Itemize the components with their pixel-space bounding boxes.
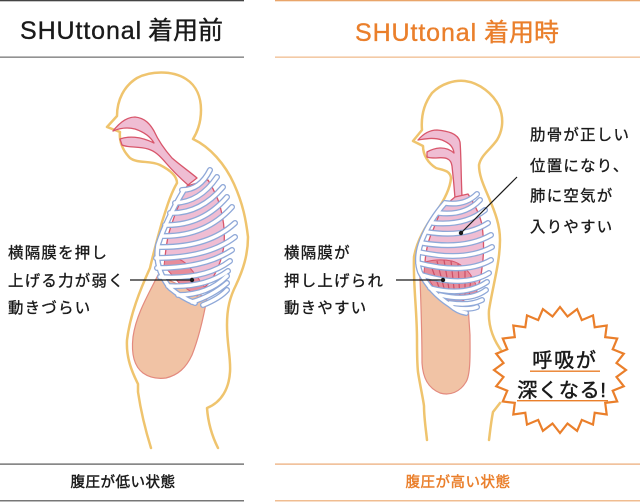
panel: before wearing	[0, 0, 248, 502]
callout text	[517, 349, 607, 402]
heading: before: 着用前	[148, 17, 223, 45]
label: diaphragm before: 動きづらい	[8, 299, 91, 317]
ribs: while wearing	[418, 194, 492, 313]
label: diaphragm while wearing: 横隔膜が	[284, 244, 351, 262]
lungs: while wearing	[425, 194, 484, 303]
callout underlines	[517, 370, 608, 401]
leader line: ribs	[459, 177, 517, 235]
belly: before	[132, 275, 207, 378]
label: diaphragm while wearing: 動きやすい	[284, 299, 367, 317]
heading: while wearing: 着用時	[484, 19, 559, 47]
burst shape	[494, 307, 626, 433]
header rule right	[275, 56, 640, 58]
footer rules right	[275, 464, 640, 502]
label: ribs: 入りやすい	[530, 218, 613, 236]
caption: before: 腹圧が低い状態	[70, 474, 176, 491]
airway: while wearing	[418, 130, 462, 198]
label: ribs: 位置になり、	[530, 157, 630, 175]
leader line: diaphragm before	[130, 278, 194, 282]
ribs: before	[156, 170, 235, 305]
label: ribs	[530, 126, 630, 236]
belly: while wearing	[420, 278, 470, 394]
label: ribs: 肺に空気が	[530, 187, 613, 205]
callout: breathing becomes deeper	[494, 307, 626, 433]
heading: before: SHUttonal	[20, 17, 142, 45]
body outline: while wearing	[413, 81, 503, 440]
label: diaphragm before: 横隔膜を押し	[8, 244, 108, 262]
lungs: before	[165, 180, 224, 289]
top rule right	[275, 0, 640, 1]
panel: while wearing	[275, 0, 640, 502]
label: diaphragm while wearing: 押し上げられ	[284, 272, 384, 290]
label: ribs: 肋骨が正しい	[530, 126, 630, 144]
caption: while wearing: 腹圧が高い状態	[406, 474, 510, 491]
top rule left	[0, 0, 244, 1]
label: diaphragm before: 上げる力が弱く	[8, 272, 125, 290]
label: diaphragm before	[8, 244, 125, 317]
leader line: diaphragm while wearing	[396, 278, 445, 282]
label: diaphragm while wearing	[284, 244, 384, 317]
callout text: 深くなる!	[517, 379, 607, 402]
diaphragm: before	[164, 257, 206, 296]
airway: before	[113, 117, 197, 185]
header rule left	[0, 56, 244, 58]
diaphragm: while wearing	[424, 260, 477, 306]
callout text: 呼吸が	[532, 349, 598, 372]
body outline: before	[107, 72, 248, 448]
heading: while wearing: SHUttonal	[355, 19, 477, 47]
footer rules left	[0, 464, 244, 502]
